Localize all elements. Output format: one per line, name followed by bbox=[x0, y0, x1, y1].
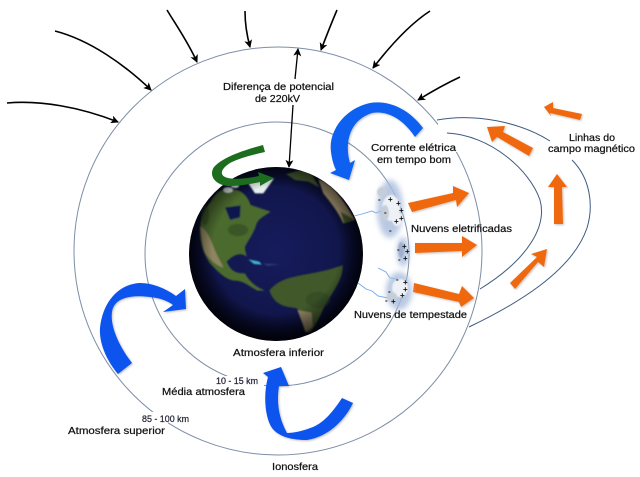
label: lower atmosphere: Atmosfera inferior bbox=[233, 348, 325, 359]
icon: electrified clouds: + bbox=[402, 242, 407, 251]
icon: electrified clouds: - bbox=[398, 255, 401, 264]
icon: electrified clouds: + bbox=[399, 206, 404, 215]
label: potential difference: Diferença de potencial bbox=[223, 82, 334, 93]
icon: electrified clouds: - bbox=[385, 296, 388, 305]
potential difference arrows bbox=[289, 49, 298, 167]
outer atmosphere circle bbox=[74, 47, 482, 455]
label: potential difference: de 220kV bbox=[255, 94, 300, 105]
label: upper atmosphere: Atmosfera superior bbox=[68, 426, 166, 437]
icon: electrified clouds: - bbox=[388, 287, 391, 296]
icon: electrified clouds: + bbox=[394, 217, 399, 226]
icon: electrified clouds: + bbox=[403, 285, 408, 294]
icon: orange arrows bbox=[408, 102, 582, 307]
label: magnetic field lines bbox=[548, 133, 635, 155]
label: 85-100 km: 85 - 100 km bbox=[142, 414, 189, 424]
icon: electrified clouds: + bbox=[403, 254, 408, 263]
icon: electrified clouds: - bbox=[378, 195, 381, 204]
label: fair weather current line 2: em tempo bom bbox=[377, 155, 451, 166]
icon: electrified clouds: + bbox=[388, 195, 393, 204]
icon: electrified clouds: - bbox=[397, 245, 400, 254]
icon: electrified clouds: - bbox=[384, 208, 387, 217]
label: middle atmosphere: Média atmosfera bbox=[162, 387, 245, 398]
icon: electrified clouds: + bbox=[391, 297, 396, 306]
icon: blue arrow left bbox=[100, 283, 186, 374]
icon: electrified clouds: - bbox=[396, 275, 399, 284]
label: fair weather current: Corrente elétrica bbox=[371, 143, 457, 154]
icon: electrified clouds bbox=[377, 180, 412, 310]
label: ionosphere: Ionosfera bbox=[272, 462, 318, 473]
globe bbox=[189, 167, 363, 341]
incoming black arrows bbox=[7, 10, 460, 122]
label: magnetic field lines: campo magnético bbox=[548, 144, 635, 155]
label: magnetic field lines: Linhas do bbox=[569, 133, 615, 144]
icon: blue arrow top right bbox=[330, 102, 423, 180]
icon: green rotation arrow bbox=[212, 145, 274, 186]
magnetic field lines bbox=[437, 118, 590, 327]
icon: electrified clouds: + bbox=[399, 214, 404, 223]
icon: electrified clouds: + bbox=[396, 199, 401, 208]
label: potential difference bbox=[222, 80, 336, 105]
icon: electrified clouds: + bbox=[405, 247, 410, 256]
label: storm clouds: Nuvens de tempestade bbox=[354, 310, 467, 321]
icon: electrified clouds: + bbox=[403, 278, 408, 287]
icon: electrified clouds: + bbox=[400, 291, 405, 300]
middle atmosphere circle bbox=[145, 122, 409, 386]
icon: blue arrow bottom bbox=[263, 367, 353, 440]
icon: lightning bolts bbox=[354, 209, 398, 298]
label: electrified clouds: Nuvens eletrificadas bbox=[411, 224, 512, 235]
label: 10-15 km: 10 - 15 km bbox=[216, 376, 258, 386]
icon: electrified clouds: - bbox=[389, 226, 392, 235]
